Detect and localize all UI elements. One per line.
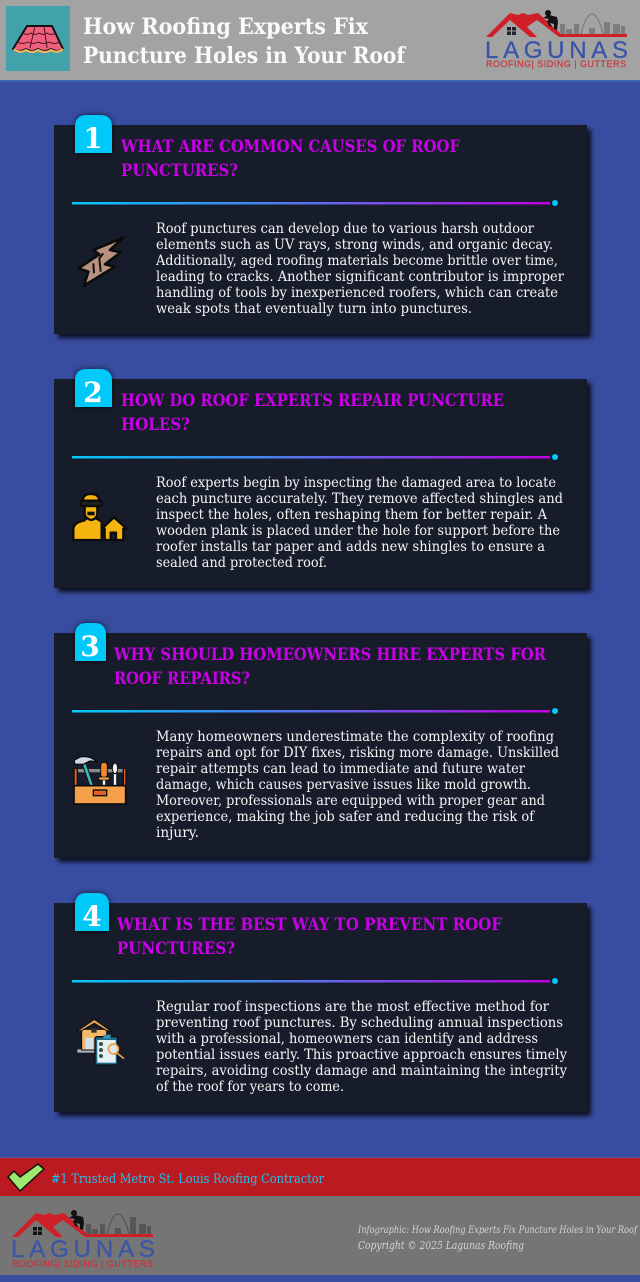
heading 3: WHY SHOULD HOMEOWNERS HIRE EXPERTS FOR (113, 645, 547, 665)
body text 3: damage, which causes pervasive issues like mold growth. (156, 777, 531, 793)
number badge 1 (75, 115, 112, 155)
body text 2: inspect the holes, often reshaping them for better repair. A (156, 507, 547, 523)
title: Puncture Holes in Your Roof (83, 43, 406, 69)
panel: repair (54, 369, 587, 588)
body text 2 (156, 475, 563, 571)
panel: causes (54, 115, 587, 334)
number badge 4 (75, 893, 109, 933)
number badge 4: 4 (82, 900, 102, 933)
divider 3 (72, 708, 558, 714)
divider 2 (72, 454, 558, 460)
icon: check mark (8, 1164, 44, 1191)
banner text: #1 Trusted Metro St. Louis Roofing Contractor (51, 1172, 325, 1187)
body text 2: roofer installs tar paper and adds new shingles to ensure a (156, 539, 545, 555)
header logo (485, 10, 628, 69)
number badge 3: 3 (80, 630, 100, 663)
body text 4 (156, 999, 567, 1095)
header logo: LAGUNAS (485, 37, 628, 64)
body text 1: elements such as UV rays, strong winds, and organic decay. (156, 237, 553, 253)
title (83, 14, 406, 69)
body text 4: Regular roof inspections are the most effective method for (156, 999, 549, 1015)
body text 1: handling of tools by inexperienced roofers, which can create (156, 285, 558, 301)
body text 1: Additionally, aged roofing materials become brittle over time, (155, 253, 558, 269)
header band (0, 0, 640, 82)
body text 2: each puncture accurately. They remove affected shingles and (156, 491, 563, 507)
body text 1: weak spots that eventually turn into punctures. (156, 301, 472, 317)
body text 3: injury. (156, 825, 199, 841)
icon: roof tiles (6, 6, 70, 71)
icon: house inspection (76, 1019, 124, 1065)
body text 3: Many homeowners underestimate the complexity of roofing (156, 729, 554, 745)
heading 2: HOW DO ROOF EXPERTS REPAIR PUNCTURE (121, 391, 504, 411)
icon: roofer and house (73, 494, 127, 540)
footer logo: LAGUNAS (11, 1236, 155, 1263)
footer logo: ROOFING| SIDING | GUTTERS (12, 1259, 153, 1269)
title: How Roofing Experts Fix (83, 14, 369, 40)
icon: roof crack (78, 238, 123, 286)
body text 3: repair attempts can lead to immediate and future water (156, 761, 525, 777)
number badge 2 (75, 369, 112, 409)
body text 4: with a professional, homeowners can identify and address (156, 1031, 538, 1047)
divider 1 (72, 200, 558, 206)
trust banner (0, 1157, 640, 1196)
number badge 3 (75, 623, 106, 663)
body text 1 (155, 221, 564, 317)
heading 4: PUNCTURES? (117, 939, 235, 959)
body text 4: potential issues early. This proactive approach ensures timely (156, 1047, 567, 1063)
number badge 1: 1 (83, 122, 103, 155)
body text 1: leading to cracks. Another significant contributor is improper (156, 269, 564, 285)
body text 3: repairs and opt for DIY fixes, risking more damage. Unskilled (156, 745, 559, 761)
heading 4 (116, 915, 502, 959)
body text 2: sealed and protected roof. (156, 555, 327, 571)
body text 1: Roof punctures can develop due to various harsh outdoor (156, 221, 534, 237)
heading 1: WHAT ARE COMMON CAUSES OF ROOF (120, 137, 460, 157)
icon: toolbox (74, 757, 126, 804)
heading 4: WHAT IS THE BEST WAY TO PREVENT ROOF (116, 915, 502, 935)
heading 1: PUNCTURES? (121, 161, 238, 181)
heading 3 (113, 645, 547, 689)
panel: why hire experts (54, 623, 587, 858)
number badge 2: 2 (83, 376, 103, 409)
body text 2: wooden plank is placed under the hole for support before the (156, 523, 560, 539)
heading 3: ROOF REPAIRS? (114, 669, 250, 689)
body text 4: of the roof for years to come. (156, 1079, 344, 1095)
body text 3: experience, making the job safer and reducing the risk of (156, 809, 535, 825)
body text 4: preventing roof punctures. By scheduling annual inspections (156, 1015, 563, 1031)
footer band (0, 1196, 640, 1275)
body text 4: repairs, avoiding costly damage and maintaining the integrity (156, 1063, 567, 1079)
heading 2 (121, 391, 504, 435)
body text 3 (156, 729, 559, 841)
heading 2: HOLES? (121, 415, 190, 435)
heading 1 (120, 137, 460, 181)
footer logo (11, 1210, 155, 1269)
divider 4 (72, 978, 558, 984)
body text 3: Moreover, professionals are equipped with proper gear and (156, 793, 545, 809)
panel: prevention (54, 893, 587, 1112)
footer credit (357, 1224, 639, 1252)
footer credit: Copyright © 2025 Lagunas Roofing (358, 1239, 524, 1252)
header logo: ROOFING| SIDING | GUTTERS (486, 59, 626, 69)
body text 2: Roof experts begin by inspecting the damaged area to locate (156, 475, 556, 491)
